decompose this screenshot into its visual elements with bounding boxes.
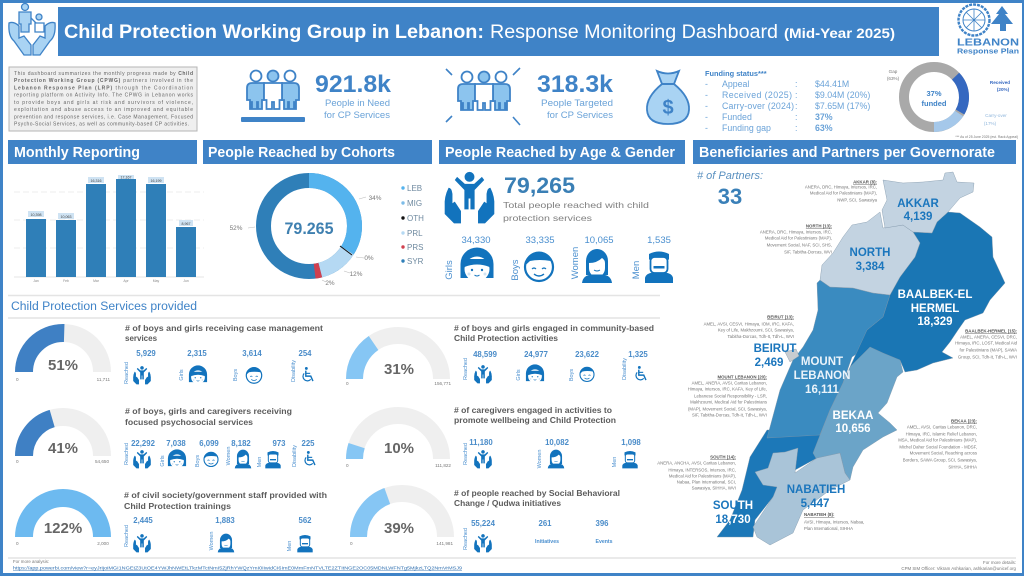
map label: nabatieh	[787, 484, 845, 510]
partners count	[697, 170, 763, 209]
funding status list: -	[705, 90, 708, 100]
total people reached: Total people reached with child	[503, 200, 649, 210]
funding status list: 37%	[815, 112, 833, 122]
heading: monthly reporting: Monthly Reporting	[14, 145, 140, 161]
gauge: case management	[16, 333, 110, 382]
total people reached: protection services	[503, 213, 592, 223]
funding status list: Appeal	[722, 79, 749, 89]
partners: south: Himaya, INTERSOS, Intersos, IRC,	[668, 468, 736, 472]
breakdown: girls: 34,330	[461, 235, 491, 246]
partners: north	[760, 224, 833, 254]
map label: south	[713, 500, 753, 526]
gauge: staff trainings: 0	[16, 541, 19, 546]
total people reached: 79,265	[504, 173, 575, 198]
title banner: (Mid-Year 2025)	[784, 26, 895, 41]
footer: contact details	[901, 560, 1017, 571]
partners: beirut: AMEL, AVSI, CESVI, Himaya, IOM, IRC, KAFA,	[704, 322, 794, 326]
gauge: case management: 11,711	[97, 377, 110, 382]
service: focused psychosocial services: focused psychosocial services	[125, 418, 254, 427]
map label: bekaa	[833, 410, 873, 435]
legend: cohorts: PRL	[407, 229, 423, 238]
service: staff trainings: 562	[298, 516, 312, 525]
service: social behavioral change	[454, 489, 620, 552]
service: caregiver activities: 11,180	[469, 438, 493, 447]
bar chart: monthly reporting	[14, 175, 204, 283]
service: focused psychosocial services: 7,038	[166, 439, 186, 448]
breakdown: men	[631, 235, 673, 283]
gauge: community-based activities: 31%	[384, 361, 414, 378]
legend: cohorts: LEB	[407, 184, 422, 193]
gauge: community-based activities	[346, 336, 451, 386]
service: focused psychosocial services: # of boys, girls and caregivers receiving	[125, 407, 292, 416]
gauge: caregiver activities: 111,822	[435, 463, 451, 468]
footer: analysis link: https://app.powerbi.com/view?r=eyJrIjoiMGI1NGEtZ3UtOE4YWJhNWEtLTkzMTctNmI5ZjRhYWQzYmI0IiwidCI6ImE0MmFmNTVLTE2ZTItNGE2OC05MDNLWFNTg5MjkzLTQ2NmVrMSJ9	[13, 566, 463, 570]
gauge: community-based activities: 0	[346, 381, 349, 386]
partners: baalbek-hermel: AMEL, ANERA, CESVI, DRC,	[960, 334, 1017, 340]
funding status list: :	[795, 90, 797, 100]
map label: mount lebanon	[794, 356, 850, 396]
partners: mount lebanon: Lebanese Social Responsibility - LSR,	[694, 394, 767, 398]
legend: cohorts	[401, 184, 424, 266]
map label: beirut	[754, 343, 796, 369]
partners: akkar: ANERA, DRC, Himaya, Intersos, IRC,	[805, 184, 877, 190]
text block: dashboard introduction: Protection Working Group (CPWG) partners involved in the	[14, 78, 193, 84]
breakdown: men: Men	[631, 261, 642, 279]
heading: people reached by age and gender: People Reached by Age & Gender	[445, 145, 675, 161]
service: staff trainings: Men	[287, 541, 293, 551]
bar chart: monthly reporting: Jan	[33, 279, 39, 283]
service: caregiver activities: 1,098	[621, 438, 641, 447]
funding status list: 63%	[815, 123, 833, 133]
bar chart: monthly reporting: 16,316	[90, 179, 102, 183]
service: community-based activities: # of boys and girls engaged in community-based	[454, 324, 654, 333]
partners: bekaa: MSA, Medical Aid for Palestinians (MAP),	[898, 438, 977, 442]
funding donut chart: Received	[990, 80, 1010, 85]
breakdown: women: 10,065	[584, 235, 614, 246]
region: north	[820, 212, 920, 295]
funding donut chart: (63%)	[887, 76, 900, 81]
service: focused psychosocial services: Girls	[160, 455, 166, 467]
stat: people targeted: 318.3k	[537, 71, 614, 98]
service: focused psychosocial services: 973	[272, 439, 286, 448]
service: community-based activities: 24,977	[524, 350, 548, 359]
partners: nabatieh: NABATIEH (8):	[804, 512, 835, 517]
partners: north: Movement Social, NAF, SCI, SHS,	[767, 242, 832, 248]
stat: people targeted: People Targeted	[541, 98, 613, 108]
funding donut chart: Carry-over	[985, 113, 1007, 118]
service: caregiver activities: 10,082	[545, 438, 570, 447]
stat: people targeted: for CP Services	[547, 110, 614, 120]
partners: akkar: Medical Aid for Palestinians (MAP),	[810, 190, 877, 196]
service: social behavioral change: Change / Qudwa initiatives	[454, 499, 562, 508]
heading: people reached by cohorts	[203, 140, 432, 164]
heading: beneficiaries and partners per governorate: Beneficiaries and Partners per Governorate	[699, 145, 995, 161]
funding status list: Funded	[722, 112, 752, 122]
service: case management: 2,315	[187, 349, 207, 358]
funding status list: Funding status***	[705, 69, 767, 78]
map label: akkar	[897, 198, 939, 223]
footer: analysis link	[13, 559, 463, 570]
bar chart: monthly reporting: 17,167	[120, 176, 132, 180]
funding status list: :	[795, 112, 797, 122]
partners: bekaa	[898, 418, 978, 470]
partners: baalbek-hermel	[955, 328, 1018, 360]
service: case management: 254	[298, 349, 312, 358]
service: focused psychosocial services: 22,292	[131, 439, 156, 448]
partners: bekaa: SIHHA, SIHHA	[948, 464, 977, 470]
funding status list: :	[795, 79, 797, 89]
stat: people in need: for CP Services	[324, 110, 391, 120]
map label: mount lebanon: 16,111	[805, 384, 840, 396]
map label: south: 18,730	[715, 514, 751, 526]
service: social behavioral change: 55,224	[471, 519, 496, 528]
service: focused psychosocial services: 8,182	[231, 439, 251, 448]
partners: south: Nabaa, Plan International, SCI,	[677, 480, 736, 484]
breakdown: women	[570, 235, 614, 283]
partners: bekaa: BEKAA (23):	[951, 418, 978, 424]
partners: bekaa: Movement Social, Reaching across	[910, 450, 977, 456]
breakdown: girls: Girls	[444, 260, 455, 280]
region: mount lebanon	[767, 280, 890, 438]
legend: cohorts: OTH	[407, 214, 424, 223]
partners: nabatieh	[804, 512, 864, 531]
bar chart: monthly reporting: May	[153, 279, 160, 283]
partners: akkar: NWP, SCI, Sawasiya	[837, 198, 878, 202]
map label: north: 3,384	[856, 261, 885, 273]
donut chart: cohorts: 0%	[364, 255, 374, 262]
funding donut chart: funded	[922, 99, 947, 108]
service: community-based activities: Child Protection activities	[454, 334, 559, 343]
service: case management: # of boys and girls receiving case management	[125, 324, 323, 333]
stat: people in need: 921.8k	[315, 71, 392, 98]
region: south	[717, 430, 822, 537]
service: caregiver activities	[454, 406, 641, 468]
partners: baalbek-hermel: BAALBEK-HERMEL (15):	[965, 328, 1018, 334]
breakdown: men: 1,535	[647, 235, 671, 246]
icon: parent and child in hands	[9, 4, 55, 55]
service: caregiver activities: promote wellbeing and Child Protection	[454, 416, 616, 425]
donut chart: cohorts: 2%	[325, 280, 335, 287]
heading: people reached by cohorts: People Reached by Cohorts	[208, 145, 395, 161]
donut chart: cohorts	[230, 180, 382, 287]
breakdown: boys	[510, 235, 555, 281]
bar chart: monthly reporting: 8,967	[182, 222, 190, 226]
icon: money bag	[647, 71, 689, 124]
service: staff trainings: 2,445	[133, 516, 153, 525]
partners: baalbek-hermel: Himaya, IRC, LOST, Medical Aid	[955, 340, 1018, 346]
service: social behavioral change: # of people reached by Social Behavioral	[454, 489, 620, 498]
service: community-based activities: Girls	[516, 369, 522, 381]
gauge: focused psychosocial services: 0	[16, 459, 19, 464]
service: caregiver activities: Reached	[463, 443, 469, 465]
partners: south: Sawasiya, SIHHA, WVI	[692, 486, 736, 490]
service: case management	[124, 324, 323, 384]
heading: monthly reporting	[8, 140, 197, 164]
service: staff trainings: Reached	[124, 525, 130, 547]
partners: mount lebanon: SIF, Tabitha-Dorcas, Tdh-It, Tdh-L, WVI	[692, 412, 767, 418]
icon: money bag: $	[662, 97, 674, 119]
partners: nabatieh: Plan International, SIHHA	[804, 526, 853, 531]
funding donut chart	[887, 67, 1018, 139]
funding status list: Carry-over (2024)	[722, 101, 794, 111]
funding status list: -	[705, 101, 708, 111]
region: akkar	[882, 172, 974, 233]
service: social behavioral change: Events	[595, 539, 613, 545]
stat: people in need: People in Need	[325, 98, 390, 108]
service: social behavioral change: Reached	[463, 528, 469, 550]
service: case management: Girls	[179, 369, 185, 381]
partners: north: Medical Aid for Palestinians (MAP),	[765, 236, 832, 240]
icon: child held by hands	[445, 172, 494, 223]
service: case management: services	[125, 334, 158, 343]
partners: mount lebanon: Makhzoumi, Medical Aid for Palestinians	[690, 400, 767, 404]
map label: nabatieh: 5,447	[801, 498, 829, 510]
service: focused psychosocial services: Boys	[195, 455, 201, 467]
map label: bekaa: BEKAA	[833, 410, 873, 422]
gauge: staff trainings: 122%	[44, 520, 82, 537]
heading: beneficiaries and partners per governorate	[693, 140, 1016, 164]
service: focused psychosocial services: Disability	[292, 445, 298, 467]
region: baalbek-el hermel	[850, 212, 1005, 372]
funding status list: Funding gap	[722, 123, 771, 133]
text block: dashboard introduction: This dashboard summarizes the monthly progress made by Child	[14, 71, 193, 77]
logo: Lebanon Response Plan	[957, 4, 1019, 56]
partners: bekaa: Michel Daher Social Foundation - MDSF,	[899, 444, 977, 450]
service: social behavioral change: 396	[595, 519, 609, 528]
title banner: Child Protection Working Group in Lebanon:	[64, 22, 484, 43]
service: community-based activities	[454, 324, 654, 383]
partners: baalbek-hermel: for Palestinians (MAP), SAWA	[960, 348, 1017, 352]
map label: akkar: AKKAR	[897, 198, 939, 210]
service: focused psychosocial services: Reached	[124, 443, 130, 465]
bar chart: monthly reporting: Feb	[63, 279, 69, 283]
funding donut chart: 37%	[926, 89, 942, 98]
service: focused psychosocial services	[124, 407, 315, 468]
bar chart: monthly reporting: Apr	[123, 279, 130, 283]
funding donut chart: (17%)	[984, 121, 997, 126]
gauge: case management: 51%	[48, 357, 78, 374]
partners: north: NORTH (13):	[806, 224, 833, 228]
text block: dashboard introduction: Lebanon Response Plan (LRP) through the Coordination	[14, 86, 193, 92]
partners: akkar	[805, 180, 878, 202]
service: focused psychosocial services: Men	[257, 457, 263, 467]
partners: mount lebanon: AMEL, ANERA, AVSI, Caritas Lebanon,	[692, 380, 767, 386]
map label: baalbek-el hermel: 18,329	[917, 316, 953, 328]
bar chart: monthly reporting: 16,199	[150, 179, 162, 183]
logo: Lebanon Response Plan: Response Plan	[957, 46, 1019, 56]
service: staff trainings: 1,883	[215, 516, 235, 525]
logo: Lebanon Response Plan: LEBANON	[957, 36, 1019, 48]
funding status list: :	[795, 123, 797, 133]
text block: dashboard introduction: reporting platform on Activity Info. The CPWG in Lebanon works	[14, 92, 194, 98]
service: staff trainings: Child Protection trainings	[124, 502, 232, 511]
partners: mount lebanon	[688, 374, 768, 418]
service: community-based activities: Boys	[569, 369, 575, 381]
map label: north	[850, 247, 890, 273]
partners: beirut: BEIRUT (13):	[767, 314, 795, 320]
partners: north: SIF, Tabitha-Dorcas, WVI	[784, 250, 832, 254]
gauge: staff trainings	[16, 498, 109, 546]
bar chart: monthly reporting: Mar	[93, 279, 100, 283]
gauge: community-based activities: 156,771	[434, 381, 451, 386]
gauge: case management: 0	[16, 377, 19, 382]
donut chart: cohorts: 34%	[369, 195, 382, 202]
gauge: staff trainings: 2,000	[97, 541, 109, 546]
gauge: social behavioral change: 141,981	[436, 541, 453, 546]
partners: south: Medical Aid for Palestinians (MAP),	[669, 474, 736, 478]
text block: dashboard introduction: exploitation and abuse access to an improved and equitable	[14, 107, 193, 113]
partners: beirut	[704, 314, 795, 339]
partners: south: SOUTH (14):	[710, 454, 737, 460]
legend: cohorts: MIG	[407, 199, 422, 208]
gauge: focused psychosocial services: 41%	[48, 440, 78, 457]
service: case management: Reached	[124, 362, 130, 384]
funding donut chart: Gap	[889, 69, 898, 74]
service: caregiver activities: Women	[537, 450, 543, 468]
service: case management: Disability	[291, 360, 297, 382]
legend: cohorts: SYR	[407, 257, 424, 266]
map label: beirut: 2,469	[755, 357, 783, 369]
breakdown: boys: 33,335	[525, 235, 555, 246]
partners: bekaa: Himaya, IRC, Islamic Relief Lebanon,	[906, 432, 977, 436]
funding status list: -	[705, 79, 708, 89]
map label: baalbek-el hermel	[898, 289, 972, 328]
bar chart: monthly reporting: 10,398	[30, 213, 42, 217]
footer: contact details: CPM SIM Officer: Vikram Ashkarian, ashkarian@unicef.org	[901, 566, 1017, 571]
service: staff trainings: Women	[209, 532, 215, 550]
partners: south	[657, 454, 737, 490]
service: community-based activities: 1,325	[628, 350, 648, 359]
breakdown: boys: Boys	[510, 259, 521, 281]
partners count: 33	[718, 184, 742, 209]
breakdown: women: Women	[570, 247, 581, 279]
heading: child protection services provided: Child Protection Services provided	[11, 301, 197, 313]
breakdown: girls	[444, 235, 494, 282]
title banner	[58, 7, 939, 56]
service: case management: 3,614	[242, 349, 262, 358]
funding status list: $7.65M (17%)	[815, 101, 870, 111]
partners: mount lebanon: Himaya, Intersos, IRC, KAFA, Key of Life,	[688, 386, 767, 392]
service: caregiver activities: Men	[612, 457, 618, 467]
service: case management: Boys	[233, 369, 239, 381]
footer: analysis link: For more analysis:	[13, 559, 49, 564]
funding status list: :	[795, 101, 797, 111]
map label: baalbek-el hermel: HERMEL	[911, 303, 959, 315]
map of Lebanon governorates	[717, 172, 1005, 545]
donut chart: cohorts: 52%	[230, 225, 243, 232]
map label: bekaa: 10,656	[835, 423, 871, 435]
partners: bekaa: Borders, SAWA Group, SCI, Sawasiya,	[903, 458, 977, 462]
text block: dashboard introduction	[9, 67, 197, 131]
gauge: caregiver activities	[346, 416, 451, 468]
funding status list: Received (2025)	[722, 90, 792, 100]
stat: people targeted	[446, 68, 614, 125]
donut chart: cohorts: 12%	[350, 271, 363, 278]
service: community-based activities: Reached	[463, 358, 469, 380]
text block: dashboard introduction: prevention and response services, i.e. Case Management, Focused	[14, 114, 193, 120]
map label: mount lebanon: LEBANON	[794, 370, 850, 382]
service: focused psychosocial services: Women	[226, 447, 232, 465]
service: staff trainings	[124, 491, 327, 552]
partners: south: ANERA, ANCHA, AVSI, Caritas Lebanon,	[657, 460, 736, 466]
map label: beirut: BEIRUT	[754, 343, 796, 355]
partners: beirut: Tabitha-Dorcas, Tdh-It, Tdh-L, WVI	[728, 334, 794, 339]
funding status list: -	[705, 112, 708, 122]
title banner: Response Monitoring Dashboard	[490, 22, 778, 43]
partners: north: ANERA, DRC, Himaya, Intersos, IRC,	[760, 230, 832, 234]
map label: akkar: 4,139	[904, 211, 932, 223]
service: community-based activities: 48,599	[473, 350, 498, 359]
total people reached	[503, 173, 649, 223]
map label: mount lebanon: MOUNT	[801, 356, 843, 368]
region: nabatieh	[753, 448, 850, 545]
bar chart: monthly reporting: Jun	[183, 279, 189, 283]
partners: mount lebanon: MOUNT LEBANON (20):	[717, 374, 768, 380]
heading: people reached by age and gender	[439, 140, 685, 164]
service: focused psychosocial services: 225	[301, 439, 315, 448]
funding donut chart: (20%)	[997, 87, 1010, 92]
gauge: caregiver activities: 0	[346, 463, 349, 468]
service: community-based activities: Disability	[622, 358, 628, 380]
region: beirut	[785, 349, 799, 362]
gauge: social behavioral change	[350, 494, 453, 546]
map label: south: SOUTH	[713, 500, 753, 512]
map label: nabatieh: NABATIEH	[787, 484, 845, 496]
gauge: focused psychosocial services: 54,650	[95, 459, 109, 464]
partners: beirut: Key of Life, Makhzoumi, SCI, Sawasiya,	[718, 328, 794, 332]
region: bekaa	[813, 347, 903, 480]
text block: dashboard introduction: Psycho-Social Services, as well as community-based CP activities.	[14, 122, 189, 128]
service: social behavioral change: Initiatives	[535, 539, 559, 545]
gauge: social behavioral change: 0	[350, 541, 353, 546]
map label: north: NORTH	[850, 247, 890, 259]
service: case management: 5,929	[136, 349, 156, 358]
map label: baalbek-el hermel: BAALBEK-EL	[898, 289, 972, 301]
partners: bekaa: AMEL, AVSI, Caritas Lebanon, DRC,	[907, 424, 977, 430]
funding status list	[705, 69, 870, 133]
partners: akkar: AKKAR (8):	[853, 180, 878, 184]
stat: people in need	[241, 70, 392, 122]
service: staff trainings: # of civil society/government staff provided with	[124, 491, 327, 500]
bar chart: monthly reporting: 10,063	[60, 215, 72, 219]
partners: mount lebanon: (MAP), Movement Social, SCI, Sawasiya,	[688, 406, 767, 412]
donut chart: cohorts: 79.265	[284, 219, 334, 238]
service: caregiver activities: # of caregivers engaged in activities to	[454, 406, 612, 415]
funding status list: $9.04M (20%)	[815, 90, 870, 100]
partners: nabatieh: AVSI, Himaya, Intersos, Nabaa,	[804, 520, 864, 524]
gauge: caregiver activities: 10%	[384, 440, 414, 457]
partners count: # of Partners:	[697, 170, 763, 182]
footer: contact details: For more details:	[983, 560, 1016, 565]
service: focused psychosocial services: 6,099	[199, 439, 219, 448]
gauge: social behavioral change: 39%	[384, 520, 414, 537]
gauge: focused psychosocial services	[16, 417, 109, 464]
service: community-based activities: 23,622	[575, 350, 600, 359]
funding donut chart: *** As of 25 June 2025 (est. Rack Appeal)	[955, 135, 1018, 139]
funding status list: $44.41M	[815, 79, 849, 89]
service: social behavioral change: 261	[538, 519, 552, 528]
partners: baalbek-hermel: Group, SCI, Tdh-It, Tdh-L, WVI	[958, 354, 1017, 360]
text block: dashboard introduction: to provide boys and girls at risk and survivors of violence,	[14, 100, 193, 106]
funding status list: -	[705, 123, 708, 133]
legend: cohorts: PRS	[407, 243, 423, 252]
